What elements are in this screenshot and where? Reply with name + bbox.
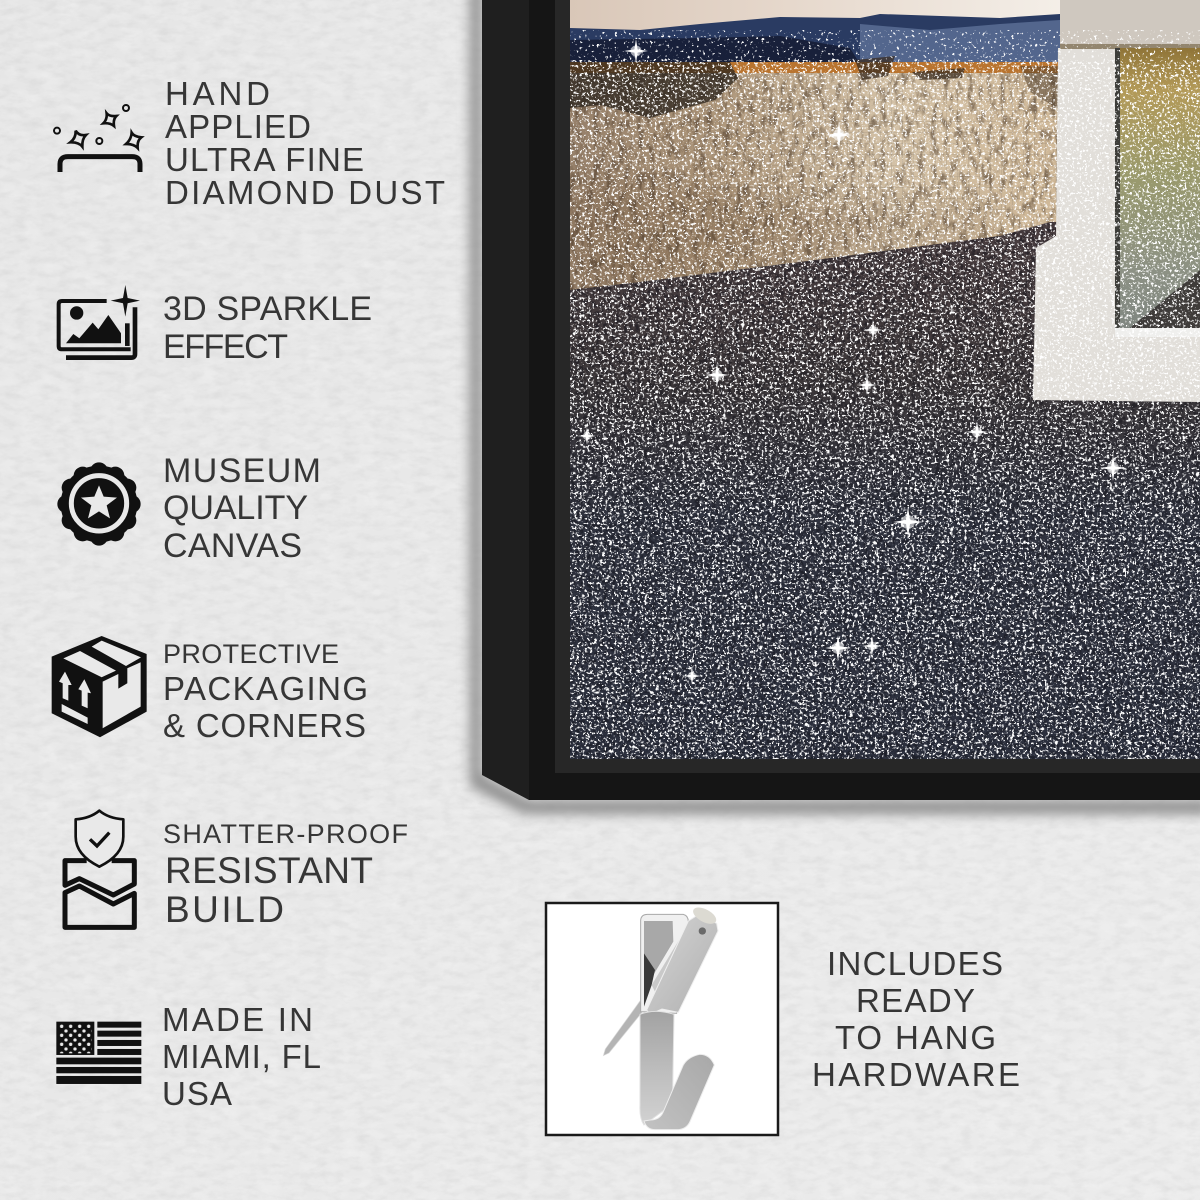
label: made in Miami FL USA: MADE IN: [162, 1001, 313, 1038]
label: includes ready to hang hardware: READY: [856, 982, 975, 1019]
label: museum quality canvas: QUALITY: [163, 489, 308, 527]
distant shrubs: [570, 56, 1060, 118]
field: [570, 62, 1060, 290]
label: made in Miami FL USA: [162, 1001, 321, 1112]
frame inner lip: [555, 0, 1200, 773]
feature: 3D sparkle: [59, 285, 372, 366]
label: hand applied ultra fine diamond dust: APPLIED: [165, 108, 311, 145]
frame side face: [482, 0, 529, 800]
mountains: [570, 14, 1060, 64]
label: 3D sparkle effect: [163, 290, 372, 366]
window glass: [1120, 48, 1200, 328]
label: protective packaging and corners: PACKAGING: [163, 670, 368, 707]
label: hand applied ultra fine diamond dust: HAND: [165, 75, 270, 112]
label: protective packaging and corners: [163, 639, 368, 744]
label: includes ready to hang hardware: TO HANG: [835, 1019, 996, 1056]
framed canvas: [482, 0, 1200, 800]
label: includes ready to hang hardware: INCLUDES: [827, 945, 1003, 982]
label: 3D sparkle effect: EFFECT: [163, 328, 288, 366]
sky: [570, 0, 1060, 30]
icon: package box: [52, 636, 147, 737]
label: includes ready to hang hardware: HARDWARE: [812, 1056, 1020, 1093]
hook back: [641, 914, 688, 1013]
label: made in Miami FL USA: MIAMI, FL: [162, 1038, 321, 1075]
label: shatter-proof resistant build: RESISTANT: [165, 850, 373, 891]
label: shatter-proof resistant build: BUILD: [165, 889, 284, 930]
icon: American flag: [56, 1022, 141, 1084]
front plate: [647, 916, 718, 1014]
label: museum quality canvas: MUSEUM: [163, 452, 321, 490]
label: hand applied ultra fine diamond dust: DIAMOND DUST: [165, 174, 445, 211]
feature: made in Miami: [56, 1001, 321, 1112]
label: 3D sparkle effect: 3D SPARKLE: [163, 290, 372, 328]
feature: museum quality canvas: [57, 452, 321, 565]
icon: sawtooth hanger hook: [603, 904, 719, 1130]
canvas photo with diamond dust: [570, 0, 1200, 759]
icon: shield over cracked block: [65, 811, 134, 927]
label: protective packaging and corners: & CORNERS: [163, 707, 366, 744]
frame front face: [529, 0, 1200, 800]
large sparkle stars: [578, 39, 1126, 685]
feature: protective packaging: [52, 636, 368, 744]
lower hook: [640, 1011, 674, 1125]
label: protective packaging and corners: PROTECTIVE: [163, 639, 339, 669]
glitter layers: [570, 30, 1200, 759]
icon: image stack with sparkle: [59, 285, 140, 358]
label: shatter-proof resistant build: [163, 819, 408, 930]
label: hand applied ultra fine diamond dust: ULTRA FINE: [165, 141, 364, 178]
frame drop shadow: [470, 0, 1200, 814]
icon: star badge: [57, 462, 141, 546]
label: includes ready to hang hardware: [812, 945, 1020, 1093]
dark ground: [570, 222, 1200, 759]
hanging hardware panel: [546, 903, 778, 1135]
label: museum quality canvas: CANVAS: [163, 527, 302, 565]
label: hand applied ultra fine diamond dust: [165, 75, 445, 211]
feature: shatter-proof build: [65, 811, 408, 930]
nail shaft: [603, 1001, 644, 1056]
feature: diamond dust: [54, 75, 445, 211]
white house wall: [1033, 0, 1200, 402]
label: museum quality canvas: [163, 452, 321, 565]
label: made in Miami FL USA: USA: [162, 1075, 232, 1112]
hardware photo box: [546, 903, 778, 1135]
label: shatter-proof resistant build: SHATTER-PROOF: [163, 819, 408, 849]
nail head: [690, 904, 719, 927]
icon: sparkling diamond dust: [54, 105, 141, 172]
